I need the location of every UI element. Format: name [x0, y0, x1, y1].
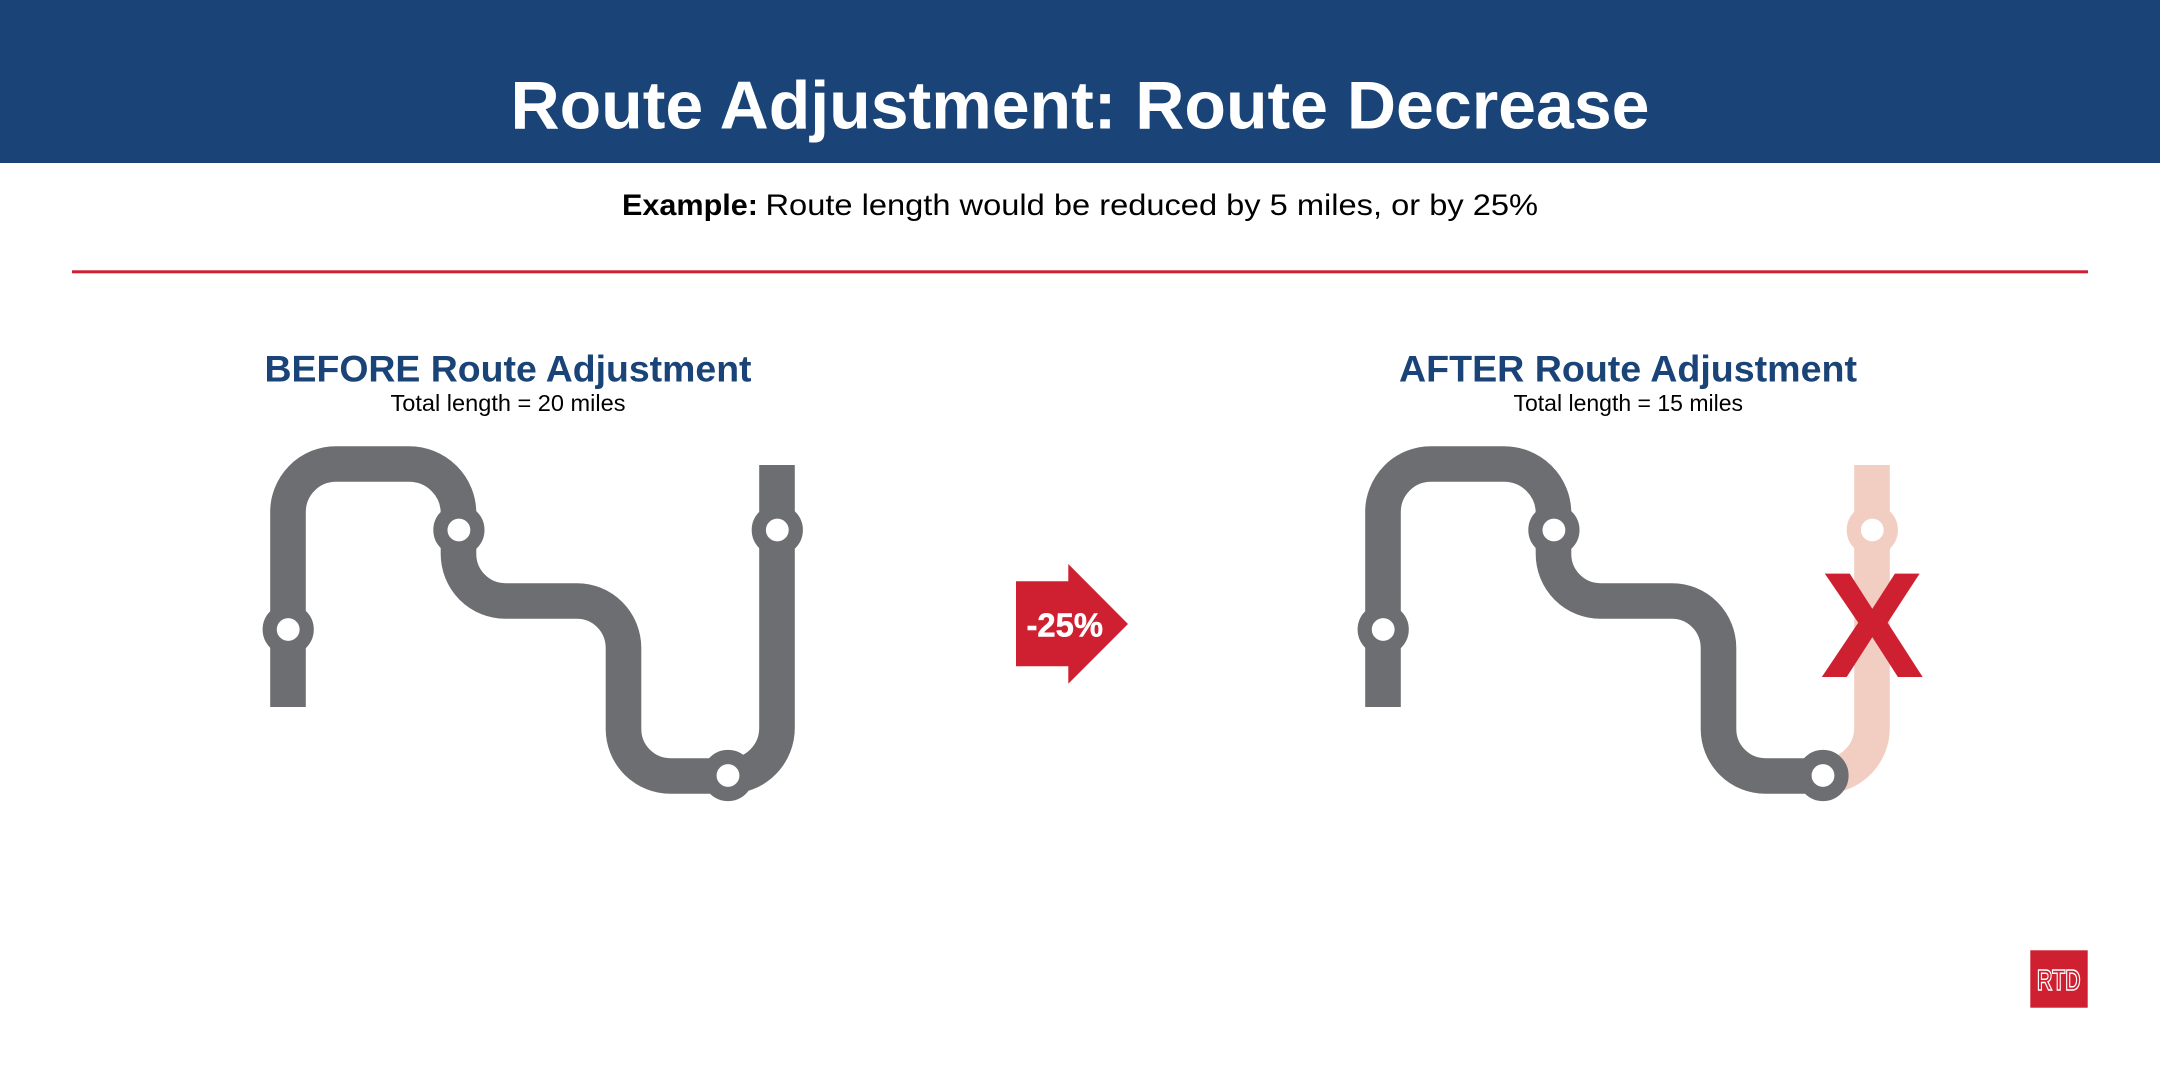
example sentence: Example: [622, 189, 758, 222]
arrow: minus 25 percent [1016, 564, 1128, 684]
route line: before [270, 464, 796, 794]
heading: before: BEFORE Route Adjustment [264, 348, 752, 390]
panel: before route adjustment [264, 348, 796, 794]
title: Route Adjustment: Route Decrease [510, 68, 1650, 144]
station: bottom [710, 757, 746, 794]
station: bottom [1804, 757, 1842, 794]
route line: after [1365, 464, 1842, 794]
example sentence: Route length would be reduced by 5 miles, or by 25% [766, 189, 1538, 222]
arrow: minus 25 percent: -25% [1026, 606, 1103, 644]
header banner [0, 0, 2160, 163]
station: top right [759, 512, 796, 548]
station: left [270, 611, 307, 648]
removed route segment [1824, 465, 1891, 776]
subheading: after length: Total length = 15 miles [1514, 390, 1743, 416]
station: top middle [440, 512, 477, 548]
station: top middle [1535, 512, 1572, 548]
logo: RTD [2030, 950, 2088, 1008]
station: left [1365, 611, 1402, 648]
icon: red X: X [1822, 543, 1922, 708]
subheading: before length: Total length = 20 miles [390, 390, 626, 416]
logo: RTD: RTD [2037, 965, 2080, 997]
panel: after route adjustment [1365, 348, 1922, 794]
heading: after: AFTER Route Adjustment [1399, 348, 1857, 390]
